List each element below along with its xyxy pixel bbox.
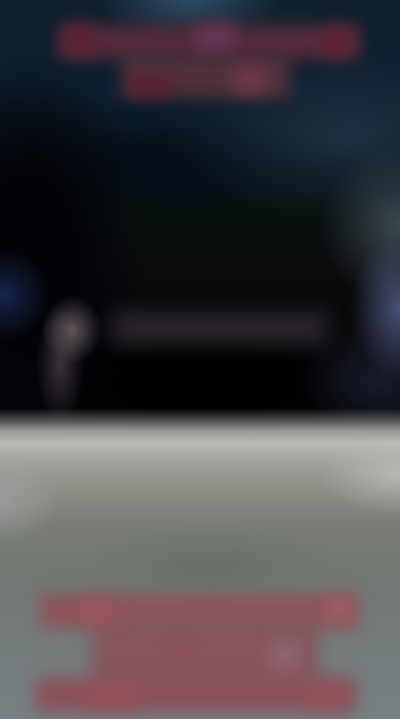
light band <box>128 327 312 329</box>
